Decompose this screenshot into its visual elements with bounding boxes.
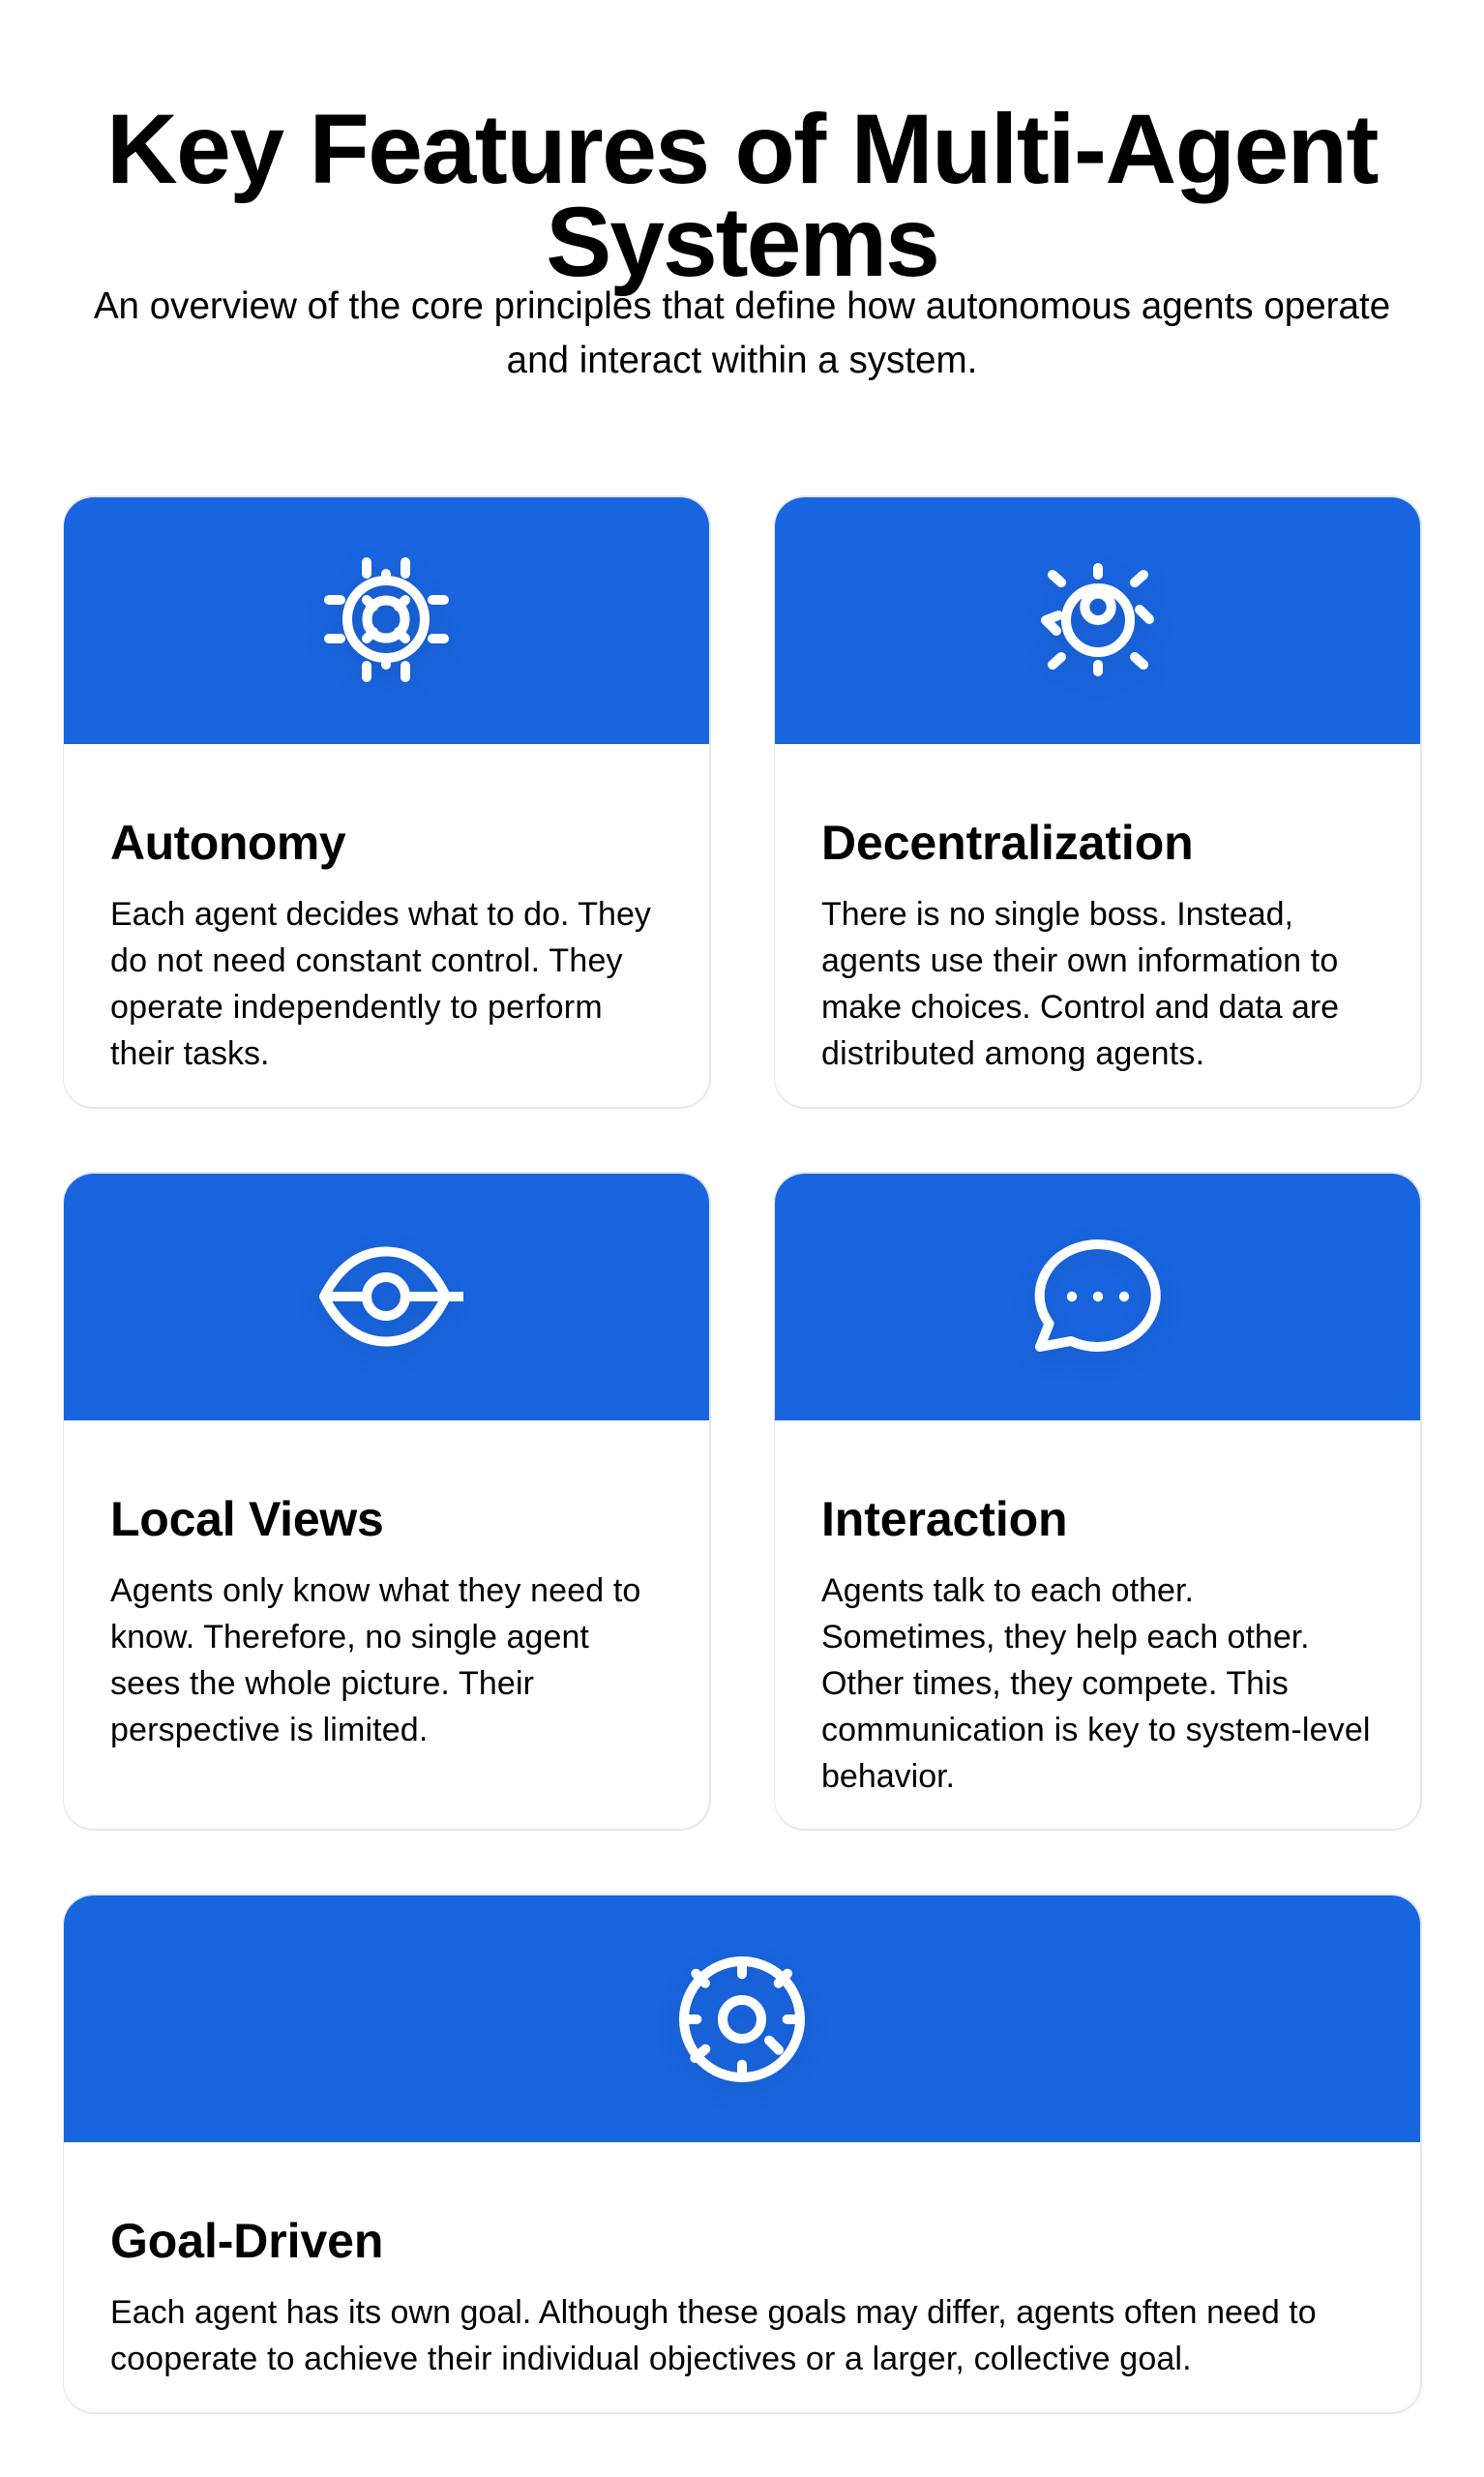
text: Interaction bbox=[821, 1572, 1371, 1795]
title: Key Features of Multi-Agent bbox=[106, 93, 1378, 203]
text: Decentralization bbox=[821, 896, 1339, 1072]
header band: Interaction bbox=[775, 1174, 1420, 1420]
header band: Goal-Driven bbox=[64, 1895, 1420, 2142]
text: Autonomy bbox=[110, 896, 651, 1072]
icon: sun eye bbox=[1041, 563, 1154, 676]
heading: Decentralization: Decentralization bbox=[821, 816, 1194, 870]
text: Decentralization: distributed among agents. bbox=[821, 1035, 1204, 1072]
text: Local Views: Agents only know what they need to bbox=[110, 1572, 640, 1609]
heading: Autonomy: Autonomy bbox=[110, 816, 345, 870]
icon: target dial bbox=[679, 1956, 805, 2090]
panel: Goal-Driven bbox=[63, 1894, 1422, 2414]
icon: chat bubble bbox=[1035, 1239, 1161, 1358]
text: Interaction: Sometimes, they help each other. bbox=[821, 1619, 1310, 1656]
text: Autonomy: Each agent decides what to do. They bbox=[110, 896, 651, 933]
heading: Interaction: Interaction bbox=[821, 1492, 1068, 1546]
text: Autonomy: their tasks. bbox=[110, 1035, 269, 1072]
text: Local Views: sees the whole picture. Their bbox=[110, 1665, 534, 1702]
text: Goal-Driven: cooperate to achieve their individual objectives or a larger, collective goal. bbox=[110, 2341, 1192, 2377]
text: Autonomy: operate independently to perform bbox=[110, 989, 603, 1026]
icon: gear target bbox=[324, 557, 449, 682]
text: Local Views: perspective is limited. bbox=[110, 1712, 428, 1748]
title bbox=[106, 93, 1378, 296]
text: Goal-Driven: Each agent has its own goal. Although these goals may differ, agents often need to bbox=[110, 2294, 1317, 2331]
subtitle: An overview of the core principles that define how autonomous agents operate bbox=[94, 285, 1390, 327]
title: Systems bbox=[546, 186, 938, 296]
header band: Local Views bbox=[64, 1174, 709, 1420]
header band: Autonomy bbox=[64, 497, 709, 744]
heading: Local Views: Local Views bbox=[110, 1492, 384, 1546]
text: Decentralization: agents use their own information to bbox=[821, 942, 1338, 979]
text: Interaction: Other times, they compete. This bbox=[821, 1665, 1289, 1702]
text: Interaction: Agents talk to each other. bbox=[821, 1572, 1194, 1609]
heading: Goal-Driven: Goal-Driven bbox=[110, 2214, 383, 2268]
panel: Decentralization bbox=[774, 495, 1422, 1109]
subtitle bbox=[94, 285, 1390, 381]
text: Decentralization: make choices. Control and data are bbox=[821, 989, 1339, 1026]
panel: Autonomy bbox=[63, 495, 711, 1109]
text: Autonomy: do not need constant control. They bbox=[110, 942, 623, 979]
text: Interaction: behavior. bbox=[821, 1758, 955, 1795]
panel: Interaction bbox=[774, 1172, 1422, 1831]
panel: Local Views bbox=[63, 1172, 711, 1831]
subtitle: and interact within a system. bbox=[507, 340, 977, 381]
text: Interaction: communication is key to system-level bbox=[821, 1712, 1371, 1748]
header band: Decentralization bbox=[775, 497, 1420, 744]
text: Goal-Driven bbox=[110, 2294, 1317, 2377]
text: Decentralization: There is no single boss. Instead, bbox=[821, 896, 1293, 933]
text: Local Views bbox=[110, 1572, 640, 1748]
icon: eye bbox=[319, 1246, 463, 1350]
text: Local Views: know. Therefore, no single agent bbox=[110, 1619, 589, 1656]
